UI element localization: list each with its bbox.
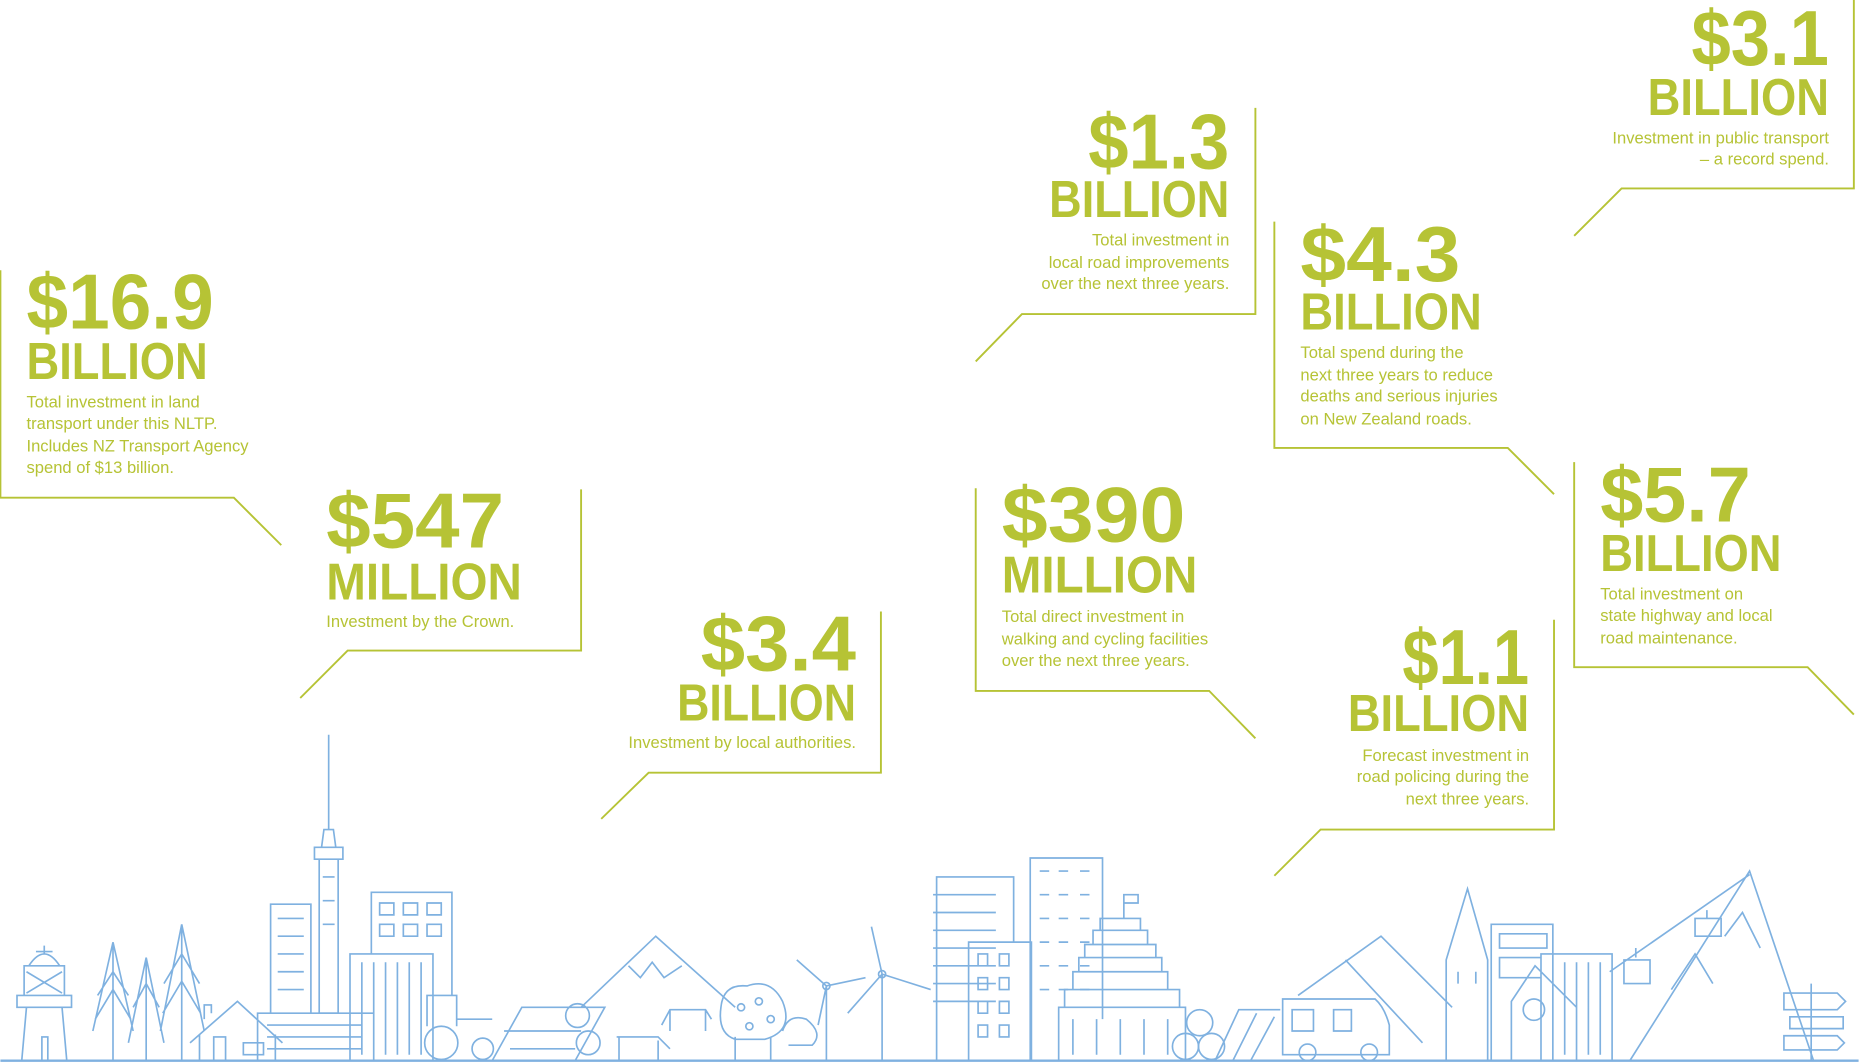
callout: $3.1 billion: – a record spend. xyxy=(1700,150,1829,169)
icon: beehive parliament xyxy=(1059,895,1185,1061)
callout: $5.7 billion: BILLION xyxy=(1600,525,1782,583)
callout: $3.1 billion: BILLION xyxy=(1648,69,1829,127)
icon: lighthouse xyxy=(17,946,72,1061)
icon: alpine mountain with gondola xyxy=(1610,871,1814,1061)
callout: $3.1 billion: Investment in public transport xyxy=(1612,128,1829,147)
callout: $390 million: Total direct investment in xyxy=(1002,607,1184,626)
icon: wind turbines xyxy=(797,927,931,1061)
callout: $16.9 billion: BILLION xyxy=(26,333,208,391)
icon: church and buildings xyxy=(1446,889,1612,1061)
callout: $1.1 billion: Forecast investment in xyxy=(1362,746,1529,765)
callout: $4.3 billion: BILLION xyxy=(1300,283,1482,341)
callout: $4.3 billion: deaths and serious injuries xyxy=(1300,387,1498,406)
callout: $1.3 billion: local road improvements xyxy=(1049,253,1229,272)
callout: $1.1 billion: road policing during the xyxy=(1357,767,1529,786)
callout: $1.1 billion xyxy=(1274,613,1554,876)
callout: $1.1 billion: BILLION xyxy=(1348,685,1529,743)
callout: $390 million: $390 xyxy=(1002,471,1185,559)
callout: $1.3 billion: Total investment in xyxy=(1092,230,1229,249)
icon: house xyxy=(190,1001,282,1061)
callout: $547 million: MILLION xyxy=(326,554,522,612)
callout: $1.3 billion xyxy=(976,97,1255,361)
callout: $5.7 billion: state highway and local xyxy=(1600,606,1773,625)
callout: $16.9 billion: Total investment in land xyxy=(26,393,200,412)
callout: $4.3 billion: next three years to reduce xyxy=(1300,365,1493,384)
callout: $547 million xyxy=(300,476,581,698)
callout: $16.9 billion: spend of $13 billion. xyxy=(26,458,174,477)
callout: $3.4 billion: $3.4 xyxy=(701,600,857,688)
callout: $5.7 billion: road maintenance. xyxy=(1600,628,1738,647)
callout: $16.9 billion: Includes NZ Transport Agency xyxy=(26,437,249,456)
callout: $3.4 billion xyxy=(601,600,881,819)
callout: $3.4 billion: BILLION xyxy=(677,675,856,733)
callout: $5.7 billion xyxy=(1574,450,1854,715)
icon: tractor and hay xyxy=(425,995,605,1061)
callout: $4.3 billion: Total spend during the xyxy=(1300,343,1464,362)
callout: $16.9 billion: transport under this NLTP. xyxy=(26,414,218,433)
callout: $1.1 billion: next three years. xyxy=(1406,790,1529,809)
callout: $4.3 billion: on New Zealand roads. xyxy=(1300,409,1472,428)
callout: $390 million: over the next three years. xyxy=(1002,651,1190,670)
icon: mountain xyxy=(581,936,735,1007)
icon: sky tower xyxy=(314,735,343,1013)
callout: $547 million: $547 xyxy=(326,476,504,564)
callout: $390 million: walking and cycling facilities xyxy=(1001,630,1208,649)
callout: $1.1 billion: $1.1 xyxy=(1402,613,1529,701)
callout: $4.3 billion: $4.3 xyxy=(1300,210,1460,298)
buildings centre xyxy=(933,858,1103,1061)
icon: mountain right xyxy=(1298,936,1452,1043)
callout: $390 million xyxy=(976,471,1255,738)
icon: bales and field xyxy=(1172,1010,1280,1061)
callout: $1.3 billion: $1.3 xyxy=(1088,97,1229,185)
icon: pine trees xyxy=(93,924,204,1061)
skyline illustration xyxy=(0,735,1859,1061)
icon: signpost xyxy=(1784,984,1846,1061)
callout: $5.7 billion: $5.7 xyxy=(1600,450,1751,538)
icon: cows xyxy=(617,1010,711,1061)
callout: $390 million: MILLION xyxy=(1002,547,1197,605)
callout: $16.9 billion xyxy=(0,257,281,545)
callout: $1.3 billion: over the next three years. xyxy=(1041,274,1229,293)
callout: $4.3 billion xyxy=(1274,210,1554,494)
callout: $3.1 billion xyxy=(1574,0,1854,236)
callout: $1.3 billion: BILLION xyxy=(1049,171,1229,229)
callout: $16.9 billion: $16.9 xyxy=(26,257,214,345)
callout: $5.7 billion: Total investment on xyxy=(1600,585,1743,604)
icon: campervan xyxy=(1283,999,1389,1061)
icon: tree xyxy=(720,984,817,1061)
callout: $547 million: Investment by the Crown. xyxy=(326,612,514,631)
buildings left xyxy=(258,892,452,1061)
callout: $3.4 billion: Investment by local authorities. xyxy=(628,733,856,752)
